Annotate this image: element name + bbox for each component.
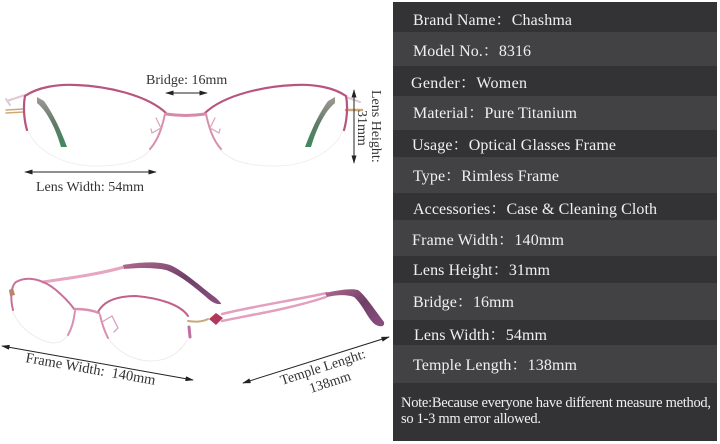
spec: gender: Gender：Women (411, 75, 527, 92)
spec: accessories: Accessories：Case & Cleaning Cloth (413, 201, 657, 218)
spec: lens width: Lens Width：54mm (414, 327, 548, 344)
bridge arrow (166, 92, 207, 94)
lens height arrow (353, 90, 355, 163)
left temple seen through lens (37, 97, 67, 147)
far temple (43, 267, 124, 282)
spec: usage: Usage：Optical Glasses Frame (412, 137, 616, 154)
hinge jewel (209, 313, 223, 325)
lens height value: 31mm (354, 110, 369, 146)
lens width label: Lens Width: 54mm (36, 180, 144, 195)
glasses front view (6, 85, 362, 166)
spec: type: Type：Rimless Frame (413, 168, 559, 185)
lens outlines (28, 130, 343, 166)
temple length value: 138mm (308, 369, 353, 397)
left rim (11, 279, 74, 310)
frame width label: Frame Width: 140mm (24, 350, 157, 389)
spec: material: Material：Pure Titanium (413, 105, 578, 122)
right hinge (346, 97, 360, 102)
far temple tip (123, 262, 221, 304)
right rim (205, 85, 347, 130)
bridge (166, 114, 205, 116)
row bands (393, 2, 717, 441)
near temple tip (325, 289, 384, 326)
spec: bridge: Bridge：16mm (413, 294, 515, 311)
lens width arrow (25, 171, 156, 173)
lens outlines (12, 310, 187, 361)
spec: brand name: Brand Name：Chashma (413, 12, 572, 29)
glasses side view (11, 262, 384, 361)
temple length label: Temple Lenght: (279, 347, 368, 389)
specification panel (393, 2, 717, 441)
note (401, 395, 711, 427)
inner rims and nose pads (150, 114, 221, 149)
left rim (24, 85, 166, 130)
bridge (75, 309, 99, 313)
note: so 1-3 mm error allowed. (401, 411, 541, 427)
frame width arrow (2, 346, 193, 380)
near temple (222, 293, 327, 321)
side hinge jewel left (9, 288, 15, 296)
inner rims (68, 311, 108, 338)
spec: model number: Model No.：8316 (413, 43, 531, 60)
spec: lens height: Lens Height：31mm (413, 262, 551, 279)
right temple seen through lens (305, 97, 335, 147)
note: Note:Because everyone have different measure method, (401, 395, 711, 411)
temple length arrow (243, 337, 389, 383)
spec: temple length: Temple Length：138mm (413, 357, 578, 374)
right rim (98, 296, 188, 316)
left hinge (6, 95, 25, 105)
lens height label: Lens Height: (368, 90, 383, 163)
nose pads (102, 316, 118, 332)
bridge label: Bridge: 16mm (146, 73, 227, 88)
spec: frame width: Frame Width：140mm (412, 232, 565, 249)
near hinge (188, 319, 208, 322)
